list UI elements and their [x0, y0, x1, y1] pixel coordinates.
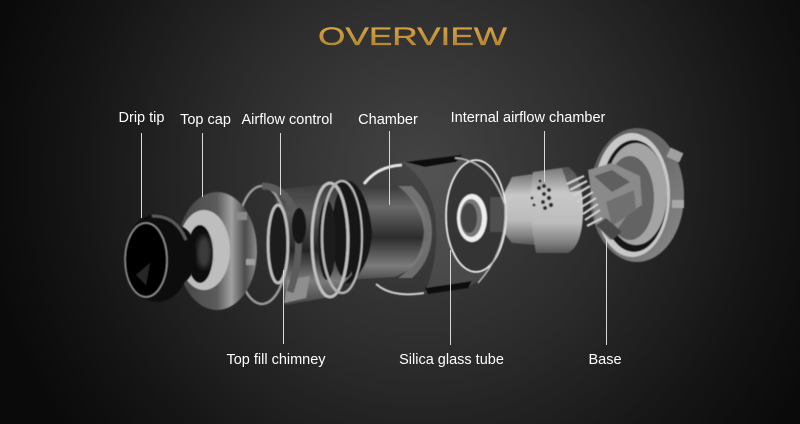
drip tip [124, 214, 196, 302]
coil [567, 176, 602, 226]
label: airflow control: Airflow control [241, 112, 333, 128]
internal airflow chamber [490, 167, 602, 253]
leader line: drip tip [140, 133, 142, 218]
silica glass tube [402, 155, 507, 294]
leader line: top cap [202, 133, 204, 197]
title: OVERVIEW [318, 23, 508, 51]
label: top cap: Top cap [180, 112, 231, 128]
label: drip tip: Drip tip [119, 110, 164, 126]
label: top fill chimney: Top fill chimney [226, 352, 326, 368]
leader line: silica glass tube [450, 250, 452, 345]
label: base: Base [588, 352, 622, 368]
airflow control [236, 186, 306, 304]
label: internal airflow chamber: Internal airflow chamber [451, 110, 606, 126]
leader line: chamber [388, 131, 390, 205]
airflow holes [530, 180, 553, 210]
leader line: top fill chimney [282, 270, 284, 344]
leader line: base [606, 238, 608, 345]
base component [588, 128, 684, 262]
label: chamber: Chamber [358, 112, 418, 128]
top fill chimney [275, 181, 362, 305]
chamber [338, 165, 432, 294]
label: silica glass tube: Silica glass tube [399, 352, 504, 368]
top cap [177, 192, 257, 310]
leader line: airflow control [280, 133, 282, 195]
leader line: internal airflow chamber [544, 131, 546, 182]
